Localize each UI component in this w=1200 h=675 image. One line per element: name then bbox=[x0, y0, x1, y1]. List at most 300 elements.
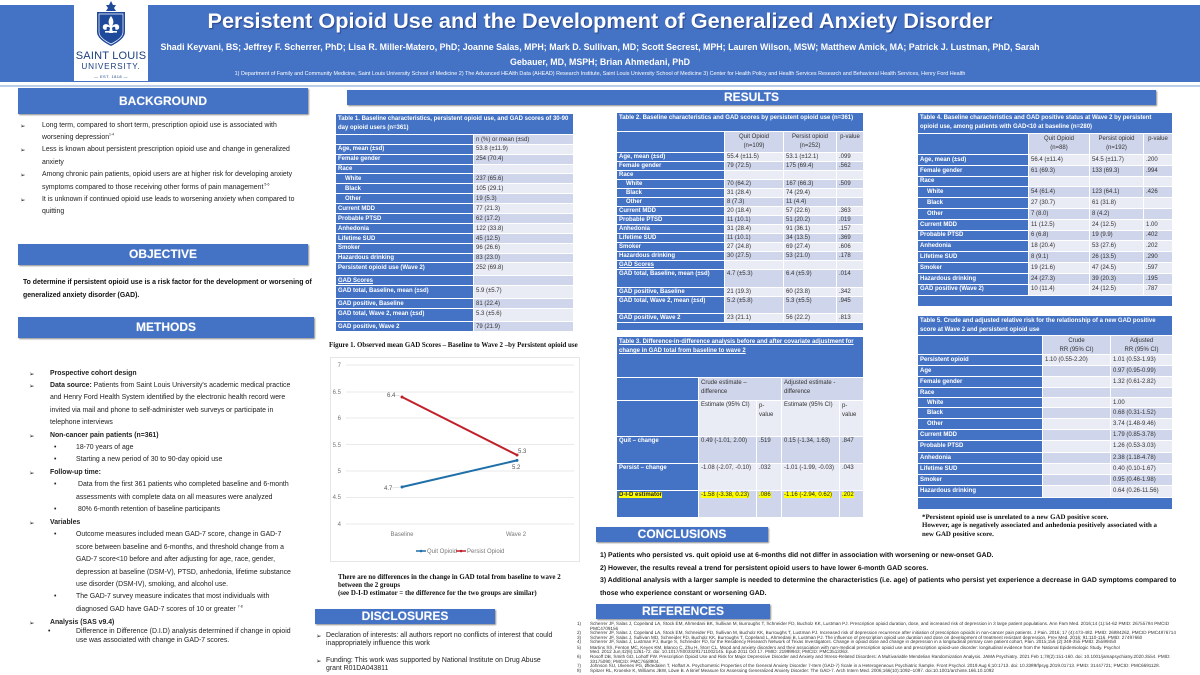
method: non-cancer pain patients bbox=[29, 432, 222, 463]
table 2: GAD scores by persistent opioid use: 30 (27.5) bbox=[727, 253, 751, 259]
table 1: baseline characteristics: 19 (5.3) bbox=[476, 196, 497, 202]
table 4: GAD positive status at wave 2: 24 (27.3) bbox=[1031, 276, 1055, 282]
table 5: crude and adjusted relative risk: 0.40 (0.10-1.67) bbox=[1113, 466, 1156, 472]
table 4: GAD positive status at wave 2: 26 (13.5) bbox=[1092, 254, 1116, 260]
table 3: difference-in-difference analysis: p- bbox=[759, 402, 764, 408]
table 5 note: *Persistent opioid use is unrelated to a new GAD positive score. bbox=[922, 514, 1108, 521]
y axis labels: 4.5 bbox=[333, 495, 342, 501]
text block: references: Scherrer JF, Salas J, Copeland LA, Stock EM, Ahmedani BK, Sullivan M, Burroughs T, Schneider FD, Bucholz KK, Lustman PJ. Prescription opioid duration, dose, and increased risk of depression in 3 large patient populations. Ann Fam Med. 2016;14 (1):54-62 PMID: 26755784 PMCID bbox=[590, 621, 1169, 626]
heading: references bbox=[596, 604, 770, 619]
table 2: GAD scores by persistent opioid use: 53.1 (±12.1) bbox=[786, 154, 818, 160]
table 1: baseline characteristics: GAD total, Baseline, mean (±sd) bbox=[338, 288, 429, 294]
table 1: baseline characteristics: 105 (29.1) bbox=[476, 186, 503, 192]
table 1: baseline characteristics: 77 (21.3) bbox=[476, 206, 500, 212]
method: variables: ➢ bbox=[29, 519, 34, 527]
method: variables: Outcome measures included mean GAD-7 score, change in GAD-7 bbox=[76, 531, 281, 538]
table 2: GAD scores by persistent opioid use: .178 bbox=[839, 253, 851, 259]
table 2: GAD scores by persistent opioid use bbox=[617, 113, 863, 330]
table 4: GAD positive status at wave 2: Anhedonia bbox=[920, 243, 951, 249]
method: variables: depression at baseline (DSM-V), PTSD, anhedonia, lifetime substance bbox=[76, 569, 291, 576]
table 4: GAD positive status at wave 2 bbox=[918, 113, 1172, 306]
bullet 1: Long term, compared to short term, prescription opioid use is associated with bbox=[42, 122, 277, 129]
table 3: difference-in-difference analysis: 0.49 (-1.01, 2.00) bbox=[701, 438, 747, 444]
table 1: baseline characteristics: 5.9 (±5.7) bbox=[476, 288, 502, 294]
table 1: baseline characteristics: Table 1. Baseline characteristics, persistent opioid use, and GAD scores of 30-90 day opioid users (n=361) bbox=[338, 116, 568, 131]
method: design: Prospective cohort design bbox=[50, 370, 137, 377]
table 4: GAD positive status at wave 2: 47 (24.5) bbox=[1092, 265, 1116, 271]
method: variables: • bbox=[54, 531, 56, 538]
table 4: GAD positive status at wave 2: Female gender bbox=[920, 168, 962, 174]
table 2: GAD scores by persistent opioid use: Other bbox=[626, 199, 642, 205]
table 1: baseline characteristics: 122 (33.8) bbox=[476, 226, 503, 232]
table 2: GAD scores by persistent opioid use: Probable PTSD bbox=[619, 217, 662, 223]
table 3: difference-in-difference analysis: -1.16 (-2.94, 0.62) bbox=[784, 492, 832, 498]
table 4: GAD positive status at wave 2: 61 (69.3) bbox=[1031, 168, 1055, 174]
method: data source: ➢ bbox=[29, 382, 34, 390]
heading: references: REFERENCES bbox=[642, 604, 724, 618]
method: design: ➢ bbox=[29, 370, 34, 378]
method: analysis: Difference in Difference (D.I.D) analysis determined if change in opioid bbox=[76, 628, 291, 635]
x axis labels: Baseline bbox=[390, 532, 414, 538]
table 4: GAD positive status at wave 2: Table 4. Baseline characteristics and GAD positive status at Wave 2 by persistent opioid use, among patients with GAD<10 at baseline (n=280) bbox=[920, 115, 1151, 130]
table 4: GAD positive status at wave 2: .402 bbox=[1146, 232, 1158, 238]
bullet 4 bbox=[20, 196, 294, 215]
method: follow-up time: Follow-up time: bbox=[50, 469, 101, 476]
table 1: baseline characteristics: 5.3 (±5.6) bbox=[476, 311, 502, 317]
table 3: difference-in-difference analysis: Adjusted estimate - bbox=[784, 380, 835, 386]
text block: background bullets bbox=[20, 122, 294, 215]
table 1: baseline characteristics: 83 (23.0) bbox=[476, 255, 500, 261]
series: quit opioid: 5.2 bbox=[512, 465, 521, 471]
table 4: GAD positive status at wave 2: .202 bbox=[1146, 243, 1158, 249]
table 4: GAD positive status at wave 2: .426 bbox=[1146, 189, 1158, 195]
y axis labels: 6.5 bbox=[333, 390, 342, 396]
table 2: GAD scores by persistent opioid use: .813 bbox=[839, 315, 851, 321]
heading: background: BACKGROUND bbox=[119, 94, 207, 108]
table 2: GAD scores by persistent opioid use: Smoker bbox=[619, 244, 641, 250]
header band bbox=[0, 5, 1200, 82]
series: persist opioid bbox=[387, 393, 527, 456]
table 3: difference-in-difference analysis: .847 bbox=[842, 438, 854, 444]
text block: references: Johnson SU, Ulvenes PG, Øktedalen T, Hoffart A. Psychometric Properties of the General Anxiety Disorder 7-Item (GAD-7) Scale in a Heterogeneous Psychiatric Sample. Front Psychol. 2019 Aug 6;10:1713. doi: 10.3389/fpsyg.2019.01713. PMID: 31447721; PMCID: PMC6691128. bbox=[590, 663, 1160, 668]
table 1: baseline characteristics: Other bbox=[345, 196, 361, 202]
table 3: difference-in-difference analysis: .202 bbox=[842, 492, 854, 498]
table 2: GAD scores by persistent opioid use: Anhedonia bbox=[619, 226, 650, 232]
table 1: baseline characteristics: Current MDD bbox=[338, 206, 375, 212]
table 1: baseline characteristics: GAD positive, Baseline bbox=[338, 301, 404, 307]
table 2: GAD scores by persistent opioid use: GAD total, Baseline, mean (±sd) bbox=[619, 271, 710, 277]
table 2: GAD scores by persistent opioid use: Persist opioid bbox=[792, 134, 828, 140]
table 2: GAD scores by persistent opioid use: 175 (69.4) bbox=[786, 163, 813, 169]
table 4: GAD positive status at wave 2: Lifetime SUD bbox=[920, 254, 957, 260]
table 4: GAD positive status at wave 2: .195 bbox=[1146, 276, 1158, 282]
text block: references: 3) bbox=[577, 634, 581, 640]
table 1: baseline characteristics: Hazardous drinking bbox=[338, 255, 394, 261]
table 1: baseline characteristics: Race bbox=[338, 166, 352, 172]
table 4: GAD positive status at wave 2: Smoker bbox=[920, 265, 942, 271]
table 4: GAD positive status at wave 2: 39 (20.3) bbox=[1092, 276, 1116, 282]
method: non-cancer pain patients: • bbox=[54, 456, 56, 463]
x axis labels bbox=[390, 532, 527, 538]
bullet 4: ➢ bbox=[20, 196, 25, 204]
table 1: baseline characteristics: GAD total, Wave 2, mean (±sd) bbox=[338, 311, 424, 317]
method: non-cancer pain patients: Starting a new period of 30 to 90-day opioid use bbox=[76, 456, 222, 463]
y axis labels: 5 bbox=[338, 469, 342, 475]
table 4: GAD positive status at wave 2: Current MDD bbox=[920, 222, 957, 228]
text block: references: 4) bbox=[577, 638, 581, 644]
table 5: crude and adjusted relative risk: 1.26 (0.53-3.03) bbox=[1113, 443, 1156, 449]
bullet 2 bbox=[20, 146, 290, 166]
table 1: baseline characteristics: Female gender bbox=[338, 156, 380, 162]
method: variables: Variables bbox=[50, 519, 80, 526]
heading: results: RESULTS bbox=[724, 90, 779, 104]
table 2: GAD scores by persistent opioid use: Lifetime SUD bbox=[619, 235, 656, 241]
table 3: difference-in-difference analysis: 0.15 (-1.34, 1.63) bbox=[784, 438, 830, 444]
table 5: crude and adjusted relative risk: 1.00 bbox=[1113, 400, 1125, 406]
table 3: difference-in-difference analysis: .086 bbox=[759, 492, 771, 498]
heading: conclusions bbox=[596, 527, 768, 542]
method: design bbox=[29, 370, 137, 378]
table 2: GAD scores by persistent opioid use: 8 (7.3) bbox=[727, 199, 744, 205]
logo: Saint Louis University: UNIVERSITY. bbox=[81, 62, 141, 70]
table 1: baseline characteristics: 62 (17.2) bbox=[476, 216, 500, 222]
method: follow-up time: • bbox=[54, 506, 56, 513]
series: persist opioid: 6.4 bbox=[387, 393, 396, 399]
disclosure: funding: ➢ bbox=[316, 657, 321, 665]
method: data source: and Henry Ford Health System identified by the electronic health record were bbox=[50, 394, 285, 401]
table 2: GAD scores by persistent opioid use: 51 (20.2) bbox=[786, 217, 810, 223]
table 4: GAD positive status at wave 2: 24 (12.5) bbox=[1092, 286, 1116, 292]
method: variables: use disorder (DSM-IV), smoking, and alcohol use. bbox=[76, 581, 228, 588]
table 2: GAD scores by persistent opioid use: Age, mean (±sd) bbox=[619, 154, 665, 160]
table 1: baseline characteristics: Black bbox=[345, 186, 361, 192]
bullet 3 bbox=[20, 170, 292, 191]
bullet 3: Among chronic pain patients, opioid users are at higher risk for developing anxiety bbox=[42, 171, 292, 178]
table 5: crude and adjusted relative risk: Race bbox=[920, 390, 934, 396]
table 4: GAD positive status at wave 2: 8 (9.1) bbox=[1031, 254, 1048, 260]
table 2: GAD scores by persistent opioid use: 56 (22.2) bbox=[786, 315, 810, 321]
table 1: baseline characteristics: 45 (12.5) bbox=[476, 236, 500, 242]
table 2: GAD scores by persistent opioid use: p-value bbox=[840, 134, 860, 140]
method: non-cancer pain patients: 18-70 years of age bbox=[76, 444, 133, 451]
y axis labels: 5.5 bbox=[333, 443, 342, 449]
method: follow-up time: Data from the first 361 patients who completed baseline and 6-month bbox=[78, 481, 289, 488]
table 2: GAD scores by persistent opioid use: 91 (36.1) bbox=[786, 226, 810, 232]
bullet 4: quitting bbox=[42, 208, 64, 215]
table 2: GAD scores by persistent opioid use: Hazardous drinking bbox=[619, 253, 675, 259]
table 4: GAD positive status at wave 2: 18 (20.4) bbox=[1031, 243, 1055, 249]
logo: Saint Louis University bbox=[74, 0, 148, 81]
table 4: GAD positive status at wave 2: .597 bbox=[1146, 265, 1158, 271]
chart note: (see D-I-D estimator = the difference for the two groups are similar) bbox=[338, 590, 537, 597]
table 2: GAD scores by persistent opioid use: 69 (27.4) bbox=[786, 244, 810, 250]
method: data source: Data source: Patients from Saint Louis University's academic medical practice bbox=[50, 382, 290, 389]
table 4: GAD positive status at wave 2: Hazardous drinking bbox=[920, 276, 976, 282]
table 2: GAD scores by persistent opioid use: 34 (13.5) bbox=[786, 235, 810, 241]
table 1: baseline characteristics: 96 (26.6) bbox=[476, 245, 500, 251]
x axis labels: Wave 2 bbox=[506, 532, 527, 538]
table 5: crude and adjusted relative risk: Anhedonia bbox=[920, 455, 951, 461]
method: analysis: Analysis (SAS v9.4) bbox=[50, 619, 114, 626]
table 2: GAD scores by persistent opioid use: 11 (10.1) bbox=[727, 235, 751, 241]
method: non-cancer pain patients: ➢ bbox=[29, 432, 34, 440]
table 3: difference-in-difference analysis: Crude estimate – bbox=[701, 380, 747, 386]
table 5: crude and adjusted relative risk: Adjusted bbox=[1130, 338, 1153, 344]
table 4: GAD positive status at wave 2: 24 (12.5) bbox=[1092, 222, 1116, 228]
table 5 note: new GAD positive score. bbox=[922, 531, 994, 538]
table 1: baseline characteristics: Lifetime SUD bbox=[338, 236, 375, 242]
table 2: GAD scores by persistent opioid use: .509 bbox=[839, 181, 851, 187]
table 1: baseline characteristics: Probable PTSD bbox=[338, 216, 381, 222]
table 3: difference-in-difference analysis: D-I-D estimator bbox=[619, 492, 662, 498]
table 3: difference-in-difference analysis: Quit – change bbox=[619, 438, 659, 444]
y axis labels: 6 bbox=[338, 416, 342, 422]
table 2: GAD scores by persistent opioid use: .606 bbox=[839, 244, 851, 250]
table 2: GAD scores by persistent opioid use: GAD Scores bbox=[619, 262, 654, 268]
table 3: difference-in-difference analysis: .519 bbox=[759, 438, 771, 444]
table 3: difference-in-difference analysis: value bbox=[842, 412, 856, 418]
text block: references: 1) bbox=[577, 621, 581, 626]
table 4: GAD positive status at wave 2: 10 (11.4) bbox=[1031, 286, 1055, 292]
bullet 3: symptoms compared to those receiving other forms of pain management 5-6 bbox=[42, 183, 269, 191]
table 2: GAD scores by persistent opioid use: .562 bbox=[839, 163, 851, 169]
method: variables: • bbox=[54, 593, 56, 600]
table 1: baseline characteristics: 79 (21.9) bbox=[476, 324, 500, 330]
bullet 2: ➢ bbox=[20, 146, 25, 154]
table 2: GAD scores by persistent opioid use: 79 (72.5) bbox=[727, 163, 751, 169]
table 2: GAD scores by persistent opioid use: 74 (29.4) bbox=[786, 190, 810, 196]
table 2: GAD scores by persistent opioid use: .014 bbox=[839, 271, 851, 277]
table 2: GAD scores by persistent opioid use: .157 bbox=[839, 226, 851, 232]
legend bbox=[416, 549, 504, 555]
table 5 note: However, age is negatively associated and anhedonia positively associated with a bbox=[922, 522, 1157, 529]
method: analysis bbox=[29, 618, 291, 644]
table 5: crude and adjusted relative risk: Table 5. Crude and adjusted relative risk for the relationship of a new GAD positive score at Wave 2 and persistent opioid use bbox=[920, 318, 1156, 333]
table 1: baseline characteristics: n (%) or mean (±sd) bbox=[476, 136, 529, 142]
disclosure: funding: grant R01DA043811 bbox=[326, 665, 388, 672]
text block: references: Scherrer JF, Salas J, Sullivan MD, Schneider FD, Bucholz KK, Burroughs T, Copeland L, Ahmedani B, Lustman PJ. The influence of prescription opioid use duration and dose on development of treatment resistant depression. Prev Med. 2016; 91:110-116. PMID: 27497660 bbox=[590, 634, 1142, 640]
legend: Persist Opioid bbox=[467, 549, 504, 555]
table 3: difference-in-difference analysis: p- bbox=[842, 402, 847, 408]
heading: methods: METHODS bbox=[136, 320, 196, 334]
table 2: GAD scores by persistent opioid use: 27 (24.8) bbox=[727, 244, 751, 250]
method: variables: diagnosed GAD have GAD-7 scores of 10 or greater 7-8 bbox=[76, 605, 243, 613]
table 2: GAD scores by persistent opioid use: 4.7 (±5.3) bbox=[727, 271, 753, 277]
table 3: difference-in-difference analysis: difference bbox=[701, 388, 727, 394]
heading: objective: OBJECTIVE bbox=[129, 247, 197, 261]
table 4: GAD positive status at wave 2: Quit Opioid bbox=[1044, 136, 1074, 142]
table 2: GAD scores by persistent opioid use: .019 bbox=[839, 217, 851, 223]
table 5: crude and adjusted relative risk: 1.01 (0.53-1.93) bbox=[1113, 357, 1156, 363]
table 4: GAD positive status at wave 2: Persist opioid bbox=[1098, 136, 1135, 142]
table 4: GAD positive status at wave 2: 56.4 (±11.4) bbox=[1031, 157, 1063, 163]
table 2: GAD scores by persistent opioid use: 167 (66.3) bbox=[786, 181, 813, 187]
table 5: crude and adjusted relative risk: Black bbox=[927, 410, 943, 416]
bullet 2: anxiety bbox=[42, 159, 64, 166]
chart note bbox=[338, 574, 561, 597]
table 2: GAD scores by persistent opioid use: GAD positive, Wave 2 bbox=[619, 315, 680, 321]
table 5: crude and adjusted relative risk: 0.68 (0.31-1.52) bbox=[1113, 410, 1156, 416]
legend: Quit Opioid bbox=[427, 549, 457, 555]
method: variables: GAD-7 score<10 before and after adjusting for age, race, gender, bbox=[76, 556, 275, 563]
series: quit opioid: 4.7 bbox=[384, 486, 393, 492]
table 2: GAD scores by persistent opioid use: 11 (10.1) bbox=[727, 217, 751, 223]
text block: conclusions bbox=[600, 552, 1176, 596]
text block: objective: generalized anxiety disorder (GAD). bbox=[23, 292, 139, 298]
method: data source: telephone interviews bbox=[50, 419, 113, 426]
table 2: GAD scores by persistent opioid use: 5.2 (±5.8) bbox=[727, 298, 753, 304]
table 5: crude and adjusted relative risk: 0.64 (0.26-11.56) bbox=[1113, 488, 1159, 494]
table 3: difference-in-difference analysis: Estimate (95% CI) bbox=[701, 402, 750, 408]
disclosure: interests bbox=[316, 632, 552, 646]
table 3: difference-in-difference analysis bbox=[617, 337, 863, 517]
table 1: baseline characteristics: White bbox=[345, 176, 361, 182]
heading: objective bbox=[18, 244, 308, 265]
text block: references bbox=[577, 621, 1176, 673]
table 1: baseline characteristics: 237 (65.6) bbox=[476, 176, 503, 182]
table 4: GAD positive status at wave 2: 27 (30.7) bbox=[1031, 200, 1055, 206]
bullet 3: ➢ bbox=[20, 171, 25, 179]
disclosure: funding bbox=[316, 656, 541, 672]
text block: references: 6) bbox=[577, 654, 581, 659]
bullet 1: worsening depression1-4 bbox=[42, 133, 114, 141]
table 1: baseline characteristics: Age, mean (±sd) bbox=[338, 146, 384, 152]
table 5: crude and adjusted relative risk: 1.32 (0.61-2.82) bbox=[1113, 379, 1156, 385]
authors: Shadi Keyvani, BS; Jeffrey F. Scherrer, PhD; Lisa R. Miller-Matero, PhD; Joanne Salas, MPH; Mark D. Sullivan, MD; Scott Secrest, MPH; Lauren Wilson, MSW; Matthew Amick, MA; Patrick J. Lustman, PhD, Sarah bbox=[160, 42, 1040, 52]
table 2: GAD scores by persistent opioid use: .363 bbox=[839, 208, 851, 214]
text block: conclusions: those who experience constant or worsening GAD. bbox=[600, 590, 767, 596]
table 2: GAD scores by persistent opioid use: .099 bbox=[839, 154, 851, 160]
table 2: GAD scores by persistent opioid use: .945 bbox=[839, 298, 851, 304]
method: analysis: • bbox=[48, 628, 50, 635]
table 2: GAD scores by persistent opioid use: 31 (28.4) bbox=[727, 226, 751, 232]
table 4: GAD positive status at wave 2: .787 bbox=[1146, 286, 1158, 292]
table 4: GAD positive status at wave 2: 19 (21.6) bbox=[1031, 265, 1055, 271]
table 5: crude and adjusted relative risk: 1.10 (0.55-2.20) bbox=[1045, 357, 1088, 363]
text block: objective: To determine if persistent opioid use is a risk factor for the development or worsening of bbox=[23, 279, 312, 286]
heading: disclosures: DISCLOSURES bbox=[362, 609, 448, 623]
text block: references: 2) bbox=[577, 630, 581, 635]
table 4: GAD positive status at wave 2: Black bbox=[927, 200, 943, 206]
table 4: GAD positive status at wave 2: White bbox=[927, 189, 943, 195]
logo: Saint Louis University: — EST. 1818 — bbox=[94, 74, 128, 79]
method: variables bbox=[29, 518, 291, 613]
method: follow-up time: 80% 6-month retention of baseline participants bbox=[78, 506, 220, 513]
authors bbox=[160, 42, 1040, 67]
text block: references: 8) bbox=[577, 668, 581, 673]
method: analysis: use was associated with change in GAD-7 scores. bbox=[76, 637, 229, 644]
method: follow-up time bbox=[29, 468, 289, 513]
table 2: GAD scores by persistent opioid use: GAD positive, Baseline bbox=[619, 289, 685, 295]
text block: references: Scherrer JF, Salas J, Lustman PJ, Burge S, Schneider FD, for the Residency Research Network of Texas Investigators. Change in opioid dose and change in depression in a longitudinal primary care patient cohort, Pain. 2015;156 (2):348-355 PMID: 25599450 bbox=[590, 638, 1116, 644]
heading: methods bbox=[18, 317, 314, 338]
table 3: difference-in-difference analysis: Persist – change bbox=[619, 465, 667, 471]
table 3: difference-in-difference analysis: .043 bbox=[842, 465, 854, 471]
table 1: baseline characteristics: GAD Scores bbox=[338, 278, 373, 284]
table 5: crude and adjusted relative risk: 3.74 (1.48-9.46) bbox=[1113, 421, 1156, 427]
disclosure: interests: inappropriately influence this work bbox=[326, 640, 430, 646]
table 5: crude and adjusted relative risk: Hazardous drinking bbox=[920, 488, 976, 494]
heading: background bbox=[18, 88, 308, 114]
table 4: GAD positive status at wave 2: 133 (69.3) bbox=[1092, 168, 1119, 174]
table 4: GAD positive status at wave 2: 53 (27.6) bbox=[1092, 243, 1116, 249]
text block: conclusions: 1) Patients who persisted vs. quit opioid use at 6-months did not differ in association with worsening or new-onset GAD. bbox=[600, 552, 993, 559]
table 5: crude and adjusted relative risk: White bbox=[927, 400, 943, 406]
method: follow-up time: ➢ bbox=[29, 469, 34, 477]
table 4: GAD positive status at wave 2: .200 bbox=[1146, 157, 1158, 163]
disclosure: interests: Declaration of interests: all authors report no conflicts of interest that could bbox=[326, 632, 552, 639]
text block: references: Med. 2012 Jun;42(6):1261-72. doi: 10.1017/S0033291711002145. Epub 2011 Oct 17. PMID: 21999943; PMCID: PMC3513363. bbox=[590, 649, 849, 654]
table 2: GAD scores by persistent opioid use: 21 (19.3) bbox=[727, 289, 751, 295]
chart note: There are no differences in the change in GAD total from baseline to wave 2 bbox=[338, 574, 561, 581]
table 4: GAD positive status at wave 2: Age, mean (±sd) bbox=[920, 157, 966, 163]
bullet 1 bbox=[20, 122, 277, 141]
heading: results bbox=[347, 90, 1156, 105]
table 2: GAD scores by persistent opioid use: Current MDD bbox=[619, 208, 656, 214]
table 1: baseline characteristics: Smoker bbox=[338, 245, 360, 251]
table 3: difference-in-difference analysis: value bbox=[759, 412, 773, 418]
method: non-cancer pain patients: Non-cancer pain patients (n=361) bbox=[50, 432, 159, 439]
table 4: GAD positive status at wave 2: 7 (8.0) bbox=[1031, 211, 1048, 217]
figure 1 title: Figure 1. Observed mean GAD Scores – Baseline to Wave 2 –by Persistent opioid use bbox=[329, 342, 578, 349]
table 5: crude and adjusted relative risk: 0.95 (0.46-1.98) bbox=[1113, 477, 1156, 483]
table 2: GAD scores by persistent opioid use: Table 2. Baseline characteristics and GAD scores by persistent opioid use (n=361) bbox=[619, 115, 853, 121]
table 3: difference-in-difference analysis: difference bbox=[784, 388, 810, 394]
series: quit opioid bbox=[384, 459, 521, 492]
table 5: crude and adjusted relative risk bbox=[918, 316, 1172, 509]
table 5: crude and adjusted relative risk: RR (95% CI) bbox=[1124, 346, 1159, 352]
title: Persistent Opioid Use and the Development of Generalized Anxiety Disorder bbox=[208, 8, 992, 33]
icon: shield with fleur-de-lis bbox=[97, 1, 125, 46]
affiliations: 1) Department of Family and Community Medicine, Saint Louis University School of Medicine 2) The Advanced HEAlth Data (AHEAD) Research Institute, Saint Louis University School of Medicine 3) Center for Health Policy and Health Services Research and Behavioral Health Services, Henry Ford Health bbox=[235, 71, 965, 77]
table 2: GAD scores by persistent opioid use: 20 (18.4) bbox=[727, 208, 751, 214]
text block: methods bbox=[29, 370, 291, 644]
table 4: GAD positive status at wave 2: .290 bbox=[1146, 254, 1158, 260]
table 2: GAD scores by persistent opioid use: 70 (64.2) bbox=[727, 181, 751, 187]
logo wordmark: SAINT LOUIS bbox=[76, 50, 146, 62]
method: data source bbox=[29, 382, 290, 426]
table 2: GAD scores by persistent opioid use: 55.4 (±11.5) bbox=[727, 154, 759, 160]
table 5: crude and adjusted relative risk: Probable PTSD bbox=[920, 443, 963, 449]
table 2: GAD scores by persistent opioid use: 31 (28.4) bbox=[727, 190, 751, 196]
table 3: difference-in-difference analysis: -1.01 (-1.99, -0.03) bbox=[784, 465, 834, 471]
table 4: GAD positive status at wave 2: Race bbox=[920, 178, 934, 184]
table 3: difference-in-difference analysis: -1.58 (-3.38, 0.23) bbox=[701, 492, 749, 498]
method: follow-up time: assessments with complete data on all measures were analyzed bbox=[76, 494, 272, 501]
table 4: GAD positive status at wave 2: Other bbox=[927, 211, 943, 217]
text block: references: Spitzer RL, Kroenke K, Williams JBW, Löwe B. A Brief Measure for Assessing Generalized Anxiety Disorder: The GAD-7. Arch Intern Med. 2006;166(10):1092–1097. doi:10.1001/archinte.166.10.1092 bbox=[590, 668, 994, 673]
disclosure: funding: Funding: This work was supported by National Institute on Drug Abuse bbox=[326, 657, 541, 664]
table 2: GAD scores by persistent opioid use: .369 bbox=[839, 235, 851, 241]
table 2: GAD scores by persistent opioid use: 11 (4.4) bbox=[786, 199, 806, 205]
table 4: GAD positive status at wave 2: 6 (6.8) bbox=[1031, 232, 1048, 238]
text block: references: Rosoff DB, Smith GD, Lohoff FW. Prescription Opioid Use and Risk for Major Depressive Disorder and Anxiety and Stress-Related Disorders: A Multivariable Mendelian Randomization Analysis. JAMA Psychiatry. 2021 Feb 1;78(2):151-160. doi: 10.1001/jamapsychiatry.2020.3554. PMID: bbox=[590, 654, 1171, 659]
table 2: GAD scores by persistent opioid use: Race bbox=[619, 172, 633, 178]
table 1: baseline characteristics bbox=[336, 114, 573, 331]
table 4: GAD positive status at wave 2: 61 (31.8) bbox=[1092, 200, 1116, 206]
table 3: difference-in-difference analysis: Estimate (95% CI) bbox=[784, 402, 833, 408]
table 4: GAD positive status at wave 2: (n=192) bbox=[1106, 145, 1127, 151]
text block: references: 33175090; PMCID: PMC7658804. bbox=[590, 659, 660, 664]
table 5: crude and adjusted relative risk: Female gender bbox=[920, 379, 962, 385]
table 2: GAD scores by persistent opioid use: (n=252) bbox=[800, 142, 820, 148]
table 2: GAD scores by persistent opioid use: Black bbox=[626, 190, 642, 196]
method: analysis: ➢ bbox=[29, 619, 34, 627]
y axis labels bbox=[333, 363, 342, 528]
table 5: crude and adjusted relative risk: Persistent opioid bbox=[920, 357, 969, 363]
table 4: GAD positive status at wave 2: 54.5 (±11.7) bbox=[1092, 157, 1124, 163]
text block: disclosures bbox=[316, 632, 552, 672]
